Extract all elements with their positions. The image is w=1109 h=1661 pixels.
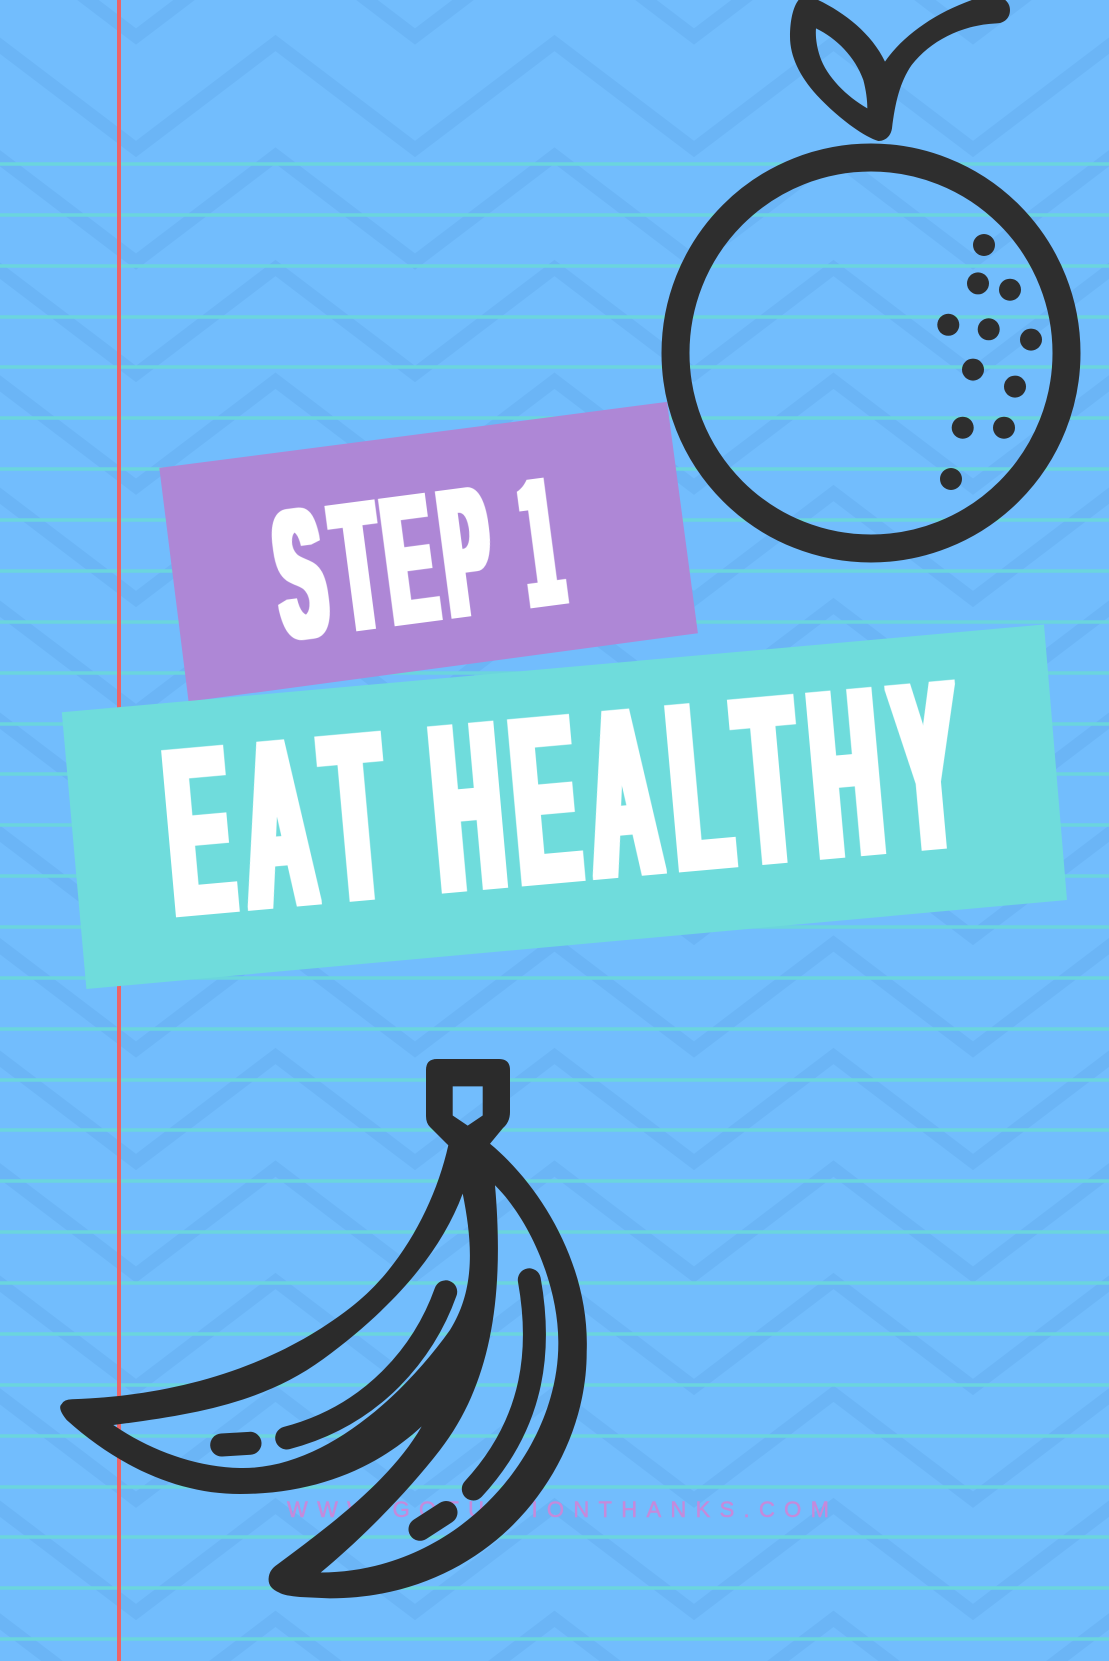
orange body ring bbox=[676, 158, 1066, 548]
orange seeds bbox=[937, 234, 1042, 490]
panel: eat healthy banner bbox=[62, 624, 1067, 989]
icon: orange bbox=[676, 0, 1066, 549]
watermark url: WWW.GOTUITIONTHANKS.COM bbox=[287, 1497, 838, 1522]
heading: step 1: STEP 1 bbox=[260, 405, 575, 688]
icon: bananas bbox=[60, 1059, 587, 1598]
banana ridge lines bbox=[222, 1280, 534, 1529]
banana bunch outline bbox=[60, 1059, 587, 1598]
panel: step label bbox=[159, 402, 698, 702]
orange stem and leaf bbox=[790, 0, 1010, 141]
heading: eat healthy: EAT HEALTHY bbox=[157, 631, 969, 967]
